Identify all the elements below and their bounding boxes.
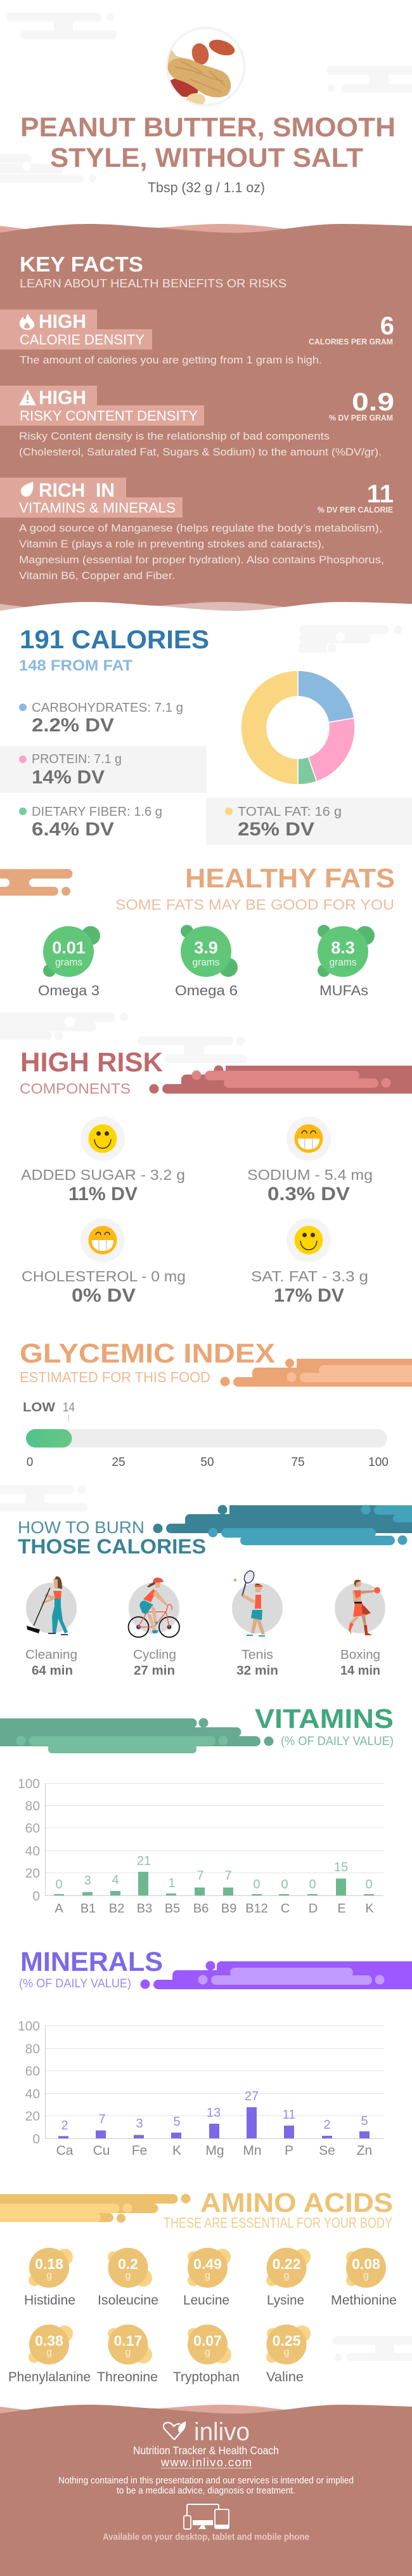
heading: amino acids: AMINO ACIDS: [200, 2188, 393, 2218]
donut chart: [241, 670, 355, 785]
bar chart: vitamins: 0: [32, 1889, 40, 1904]
badge: omega 6: Omega 6: [175, 983, 238, 998]
fact: risky content density: % DV PER GRAM: [329, 414, 393, 422]
subheading: (% OF DAILY VALUE): [281, 1734, 394, 1748]
bar chart: vitamins: 20: [25, 1866, 40, 1881]
item: added sugar: ADDED SUGAR - 3.2 g: [21, 1167, 185, 1183]
bar chart: vitamins: B9: [221, 1902, 236, 1916]
bar chart: vitamins: 60: [25, 1821, 40, 1836]
bar chart: vitamins: A: [55, 1902, 63, 1916]
bar chart: vitamins: B1: [80, 1902, 96, 1916]
bar chart: minerals: 5: [173, 2115, 181, 2129]
activity: tennis: [232, 1569, 283, 1678]
item: saturated fat: [251, 1218, 368, 1306]
bar chart: minerals: 80: [25, 2042, 40, 2056]
heading decoration: [150, 1066, 412, 1094]
heading decoration: [141, 1961, 412, 1989]
badge: mufas: [318, 925, 375, 998]
bar chart: minerals: 60: [25, 2064, 40, 2079]
amino: lysine: [266, 2248, 311, 2308]
amino: methionine: Methionine: [331, 2293, 397, 2308]
legend: protein: 14% DV: [32, 767, 105, 788]
bar chart: minerals: 27: [245, 2089, 259, 2103]
icon: person cycling: [128, 1578, 179, 1637]
logo: [164, 2418, 250, 2446]
amino: tryptophan: Tryptophan: [173, 2370, 240, 2384]
amino: threonine: Threonine: [97, 2370, 158, 2384]
legend: total fat: 25% DV: [238, 819, 314, 840]
bar chart: minerals: 40: [25, 2087, 40, 2102]
panel: footer: [0, 2405, 412, 2576]
heading decoration: [0, 869, 73, 896]
heading: calories: 191 CALORIES: [20, 625, 209, 654]
heading: those calories: THOSE CALORIES: [18, 1535, 206, 1558]
panel: amino acids: [0, 2188, 397, 2384]
heading: how to burn: HOW TO BURN: [18, 1518, 145, 1537]
fact: rich in vitamins and minerals: Vitamin B6, Copper and Fiber.: [19, 570, 175, 582]
gauge: 0: [27, 1456, 33, 1469]
fact: rich in vitamins and minerals: Vitamin E (plays a role in preventing strokes and cataracts),: [19, 538, 325, 550]
activity: tennis: 32 min: [236, 1664, 278, 1678]
panel: high risk: [20, 1047, 412, 1306]
bar chart: vitamins: [18, 1777, 383, 1916]
gauge: 75: [291, 1456, 305, 1469]
heading: healthy fats: HEALTHY FATS: [185, 863, 395, 894]
icon: grin face: [89, 1226, 117, 1255]
panel: key facts: [0, 224, 412, 618]
heading decoration: [153, 1505, 412, 1545]
item: sodium: SODIUM - 5.4 mg: [247, 1167, 373, 1183]
amino: leucine: Leucine: [183, 2293, 229, 2308]
legend: protein: PROTEIN: 7.1 g: [32, 752, 122, 766]
panel: calories: [0, 625, 412, 845]
title: PEANUT BUTTER, SMOOTH: [20, 112, 396, 143]
amino: histidine: [24, 2248, 75, 2308]
item: added sugar: [21, 1116, 185, 1205]
amino: valine: [266, 2324, 311, 2384]
subheading: LEARN ABOUT HEALTH BENEFITS OR RISKS: [20, 277, 286, 290]
badge: mufas: 8.3: [331, 938, 355, 957]
fact: risky content density: (Cholesterol, Saturated Fat, Sugars & Sodium) to the amount (%DV/gr).: [19, 446, 382, 458]
fact: calorie density: 6: [380, 312, 394, 340]
item: added sugar: 11% DV: [68, 1184, 138, 1205]
peanut photo: [166, 28, 245, 106]
legend: carbohydrates: [19, 701, 183, 736]
icon: smile face: [89, 1124, 117, 1153]
amino: threonine: [97, 2324, 158, 2384]
bar chart: minerals: P: [285, 2143, 293, 2158]
gauge: 14: [63, 1401, 75, 1415]
activity: tennis: Tenis: [241, 1648, 273, 1662]
icon: flame: [20, 313, 34, 330]
heading: minerals: MINERALS: [20, 1947, 163, 1977]
bar chart: minerals: Zn: [357, 2143, 372, 2158]
fact: risky content density: Risky Content density is the relationship of bad components: [19, 430, 330, 442]
bar chart: vitamins: B3: [137, 1902, 152, 1916]
amino: isoleucine: [98, 2248, 158, 2308]
subheading: from fat: 148 FROM FAT: [19, 657, 132, 674]
subheading: (% OF DAILY VALUE): [19, 1977, 131, 1991]
fact: calorie density: The amount of calories you are getting from 1 gram is high.: [20, 354, 322, 366]
bar chart: minerals: Cu: [93, 2143, 110, 2158]
icon: person playing tennis: [233, 1569, 265, 1637]
amino: leucine: g: [205, 2270, 210, 2281]
icon: leaf: [21, 481, 34, 497]
heading decoration: [0, 2194, 190, 2223]
bar chart: minerals: Mg: [205, 2143, 224, 2158]
amino: tryptophan: [173, 2324, 240, 2384]
fact: risky content density: RISKY CONTENT DENSITY: [20, 408, 198, 424]
amino: lysine: 0.22: [273, 2256, 300, 2272]
bar chart: minerals: 2: [323, 2118, 331, 2132]
gauge: 25: [112, 1456, 126, 1469]
amino: isoleucine: Isoleucine: [98, 2293, 158, 2308]
amino: lysine: Lysine: [267, 2293, 304, 2308]
website link: www.inlivo.com: [160, 2456, 252, 2469]
legend: protein: [19, 752, 122, 788]
fact: calorie density: [0, 310, 394, 366]
bar chart: minerals: 0: [32, 2132, 40, 2147]
bar chart: minerals: [18, 2019, 383, 2158]
amino: histidine: 0.18: [35, 2256, 63, 2272]
bar chart: vitamins: 0: [309, 1878, 316, 1892]
activity: boxing: [335, 1579, 385, 1678]
activity: cycling: [128, 1578, 179, 1678]
icon: person boxing: [349, 1579, 380, 1635]
item: sodium: 0.3% DV: [267, 1184, 350, 1205]
badge: omega 6: 3.9: [194, 938, 218, 957]
panel: healthy fats: [0, 863, 395, 998]
fact: rich in vitamins and minerals: A good source of Manganese (helps regulate the body’s metabolism),: [19, 522, 382, 534]
bar chart: minerals: Fe: [132, 2143, 147, 2158]
gauge: [23, 1401, 389, 1469]
legend: dietary fiber: 6.4% DV: [32, 819, 114, 840]
title: STYLE, WITHOUT SALT: [50, 143, 363, 173]
amino: threonine: 0.17: [114, 2332, 142, 2349]
badge: omega 6: [175, 925, 238, 998]
item: cholesterol: 0% DV: [72, 1285, 136, 1306]
heading: key facts: KEY FACTS: [20, 252, 143, 276]
item: cholesterol: [22, 1218, 186, 1306]
bar chart: minerals: K: [172, 2143, 181, 2158]
icon: grin face: [294, 1124, 323, 1153]
bar chart: minerals: 7: [98, 2112, 106, 2126]
badge: mufas: MUFAs: [319, 983, 368, 998]
disclaimer: Nothing contained in this presentation and our services is intended or implied: [58, 2475, 354, 2486]
bar chart: vitamins: C: [281, 1902, 290, 1916]
bar chart: minerals: 13: [207, 2106, 221, 2120]
amino: phenylalanine: [8, 2324, 91, 2384]
bar chart: vitamins: 40: [25, 1844, 40, 1859]
fact: rich in vitamins and minerals: Magnesium (essential for proper hydration). Also contains Phosphorus,: [19, 554, 384, 566]
amino: methionine: g: [363, 2270, 369, 2281]
logo: inlivo: [194, 2418, 250, 2446]
fact: rich in vitamins and minerals: % DV PER CALORIE: [318, 506, 393, 514]
activity: boxing: 14 min: [340, 1664, 380, 1678]
item: saturated fat: 17% DV: [274, 1285, 344, 1306]
item: sodium: [247, 1116, 373, 1205]
amino: histidine: g: [46, 2270, 52, 2281]
amino: lysine: g: [284, 2270, 289, 2281]
panel: glycemic index: [20, 1338, 412, 1469]
subheading: SOME FATS MAY BE GOOD FOR YOU: [115, 896, 394, 913]
bar chart: vitamins: 0: [281, 1878, 288, 1892]
bar chart: vitamins: D: [309, 1902, 318, 1916]
heading: glycemic index: GLYCEMIC INDEX: [20, 1338, 275, 1369]
bar chart: minerals: 20: [25, 2109, 40, 2124]
disclaimer: to be a medical advice, diagnosis or treatment.: [117, 2485, 295, 2496]
fact: calorie density: CALORIES PER GRAM: [309, 337, 393, 346]
amino: phenylalanine: g: [46, 2347, 52, 2358]
legend: dietary fiber: [19, 805, 162, 840]
item: saturated fat: SAT. FAT - 3.3 g: [251, 1268, 368, 1285]
panel: how to burn those calories: [18, 1505, 412, 1678]
bar chart: minerals: 5: [361, 2114, 368, 2128]
heading decoration: [221, 1359, 412, 1387]
activity: cleaning: 64 min: [32, 1664, 73, 1678]
bar chart: vitamins: 7: [196, 1869, 204, 1883]
panel: vitamins: [0, 1704, 394, 1916]
activity: boxing: Boxing: [340, 1648, 380, 1662]
bar chart: vitamins: 7: [224, 1869, 232, 1883]
bar chart: vitamins: 1: [168, 1876, 176, 1890]
amino: phenylalanine: Phenylalanine: [8, 2370, 91, 2384]
gauge: LOW: [23, 1401, 55, 1415]
amino: leucine: [183, 2248, 231, 2308]
bar chart: minerals: Se: [319, 2143, 335, 2158]
amino: histidine: Histidine: [24, 2293, 75, 2308]
amino: phenylalanine: 0.38: [35, 2332, 63, 2349]
amino: isoleucine: 0.2: [118, 2256, 138, 2272]
badge: omega 6: grams: [192, 957, 220, 968]
bar chart: minerals: 3: [136, 2117, 143, 2131]
heading: high risk: HIGH RISK: [20, 1047, 163, 1078]
badge: omega 3: Omega 3: [38, 983, 100, 998]
bar chart: vitamins: B12: [245, 1902, 268, 1916]
badge: omega 3: 0.01: [52, 938, 86, 957]
icon: person sweeping: [27, 1576, 68, 1635]
bar chart: minerals: Ca: [56, 2143, 74, 2158]
amino: tryptophan: 0.07: [193, 2332, 222, 2349]
bar chart: vitamins: B6: [193, 1902, 209, 1916]
amino: valine: Valine: [266, 2370, 304, 2384]
amino: valine: g: [284, 2347, 289, 2358]
fact: risky content density: [0, 386, 394, 458]
bar chart: minerals: Mn: [243, 2143, 262, 2158]
panel: minerals: [18, 1947, 412, 2158]
availability note: Available on your desktop, tablet and mobile phone: [103, 2532, 309, 2542]
fact: calorie density: CALORIE DENSITY: [20, 332, 145, 348]
bar chart: minerals: 100: [18, 2019, 40, 2034]
amino: methionine: 0.08: [352, 2256, 380, 2272]
legend: carbohydrates: CARBOHYDRATES: 7.1 g: [32, 701, 183, 715]
icon: devices: [184, 2504, 229, 2529]
fact: risky content density: 0.9: [352, 388, 394, 416]
bar chart: vitamins: 15: [334, 1860, 348, 1874]
legend: total fat: [225, 805, 342, 840]
activity: cleaning: Cleaning: [25, 1648, 77, 1662]
subheading: ESTIMATED FOR THIS FOOD: [20, 1369, 210, 1385]
bar chart: vitamins: 0: [55, 1878, 63, 1892]
badge: mufas: grams: [329, 957, 357, 968]
serving size: Tbsp (32 g / 1.1 oz): [148, 180, 265, 195]
gauge: 100: [368, 1456, 389, 1469]
bar chart: vitamins: B2: [109, 1902, 124, 1916]
disclaimer: [58, 2475, 354, 2496]
fact: rich in vitamins and minerals: RICH IN: [39, 479, 115, 501]
heading: vitamins: VITAMINS: [255, 1704, 394, 1734]
bar chart: minerals: 11: [283, 2108, 295, 2122]
amino: threonine: g: [126, 2347, 131, 2358]
bar chart: vitamins: 4: [112, 1873, 119, 1887]
fact: rich in vitamins and minerals: VITAMINS & MINERALS: [19, 500, 176, 516]
icon: smile face: [294, 1226, 323, 1255]
fact: rich in vitamins and minerals: 11: [367, 480, 394, 508]
legend: total fat: TOTAL FAT: 16 g: [238, 805, 342, 819]
item: cholesterol: CHOLESTEROL - 0 mg: [22, 1268, 186, 1285]
activity: cleaning: [25, 1576, 77, 1678]
bar chart: vitamins: 21: [137, 1854, 151, 1868]
amino: valine: 0.25: [273, 2332, 301, 2349]
bar chart: vitamins: E: [337, 1902, 346, 1916]
amino: tryptophan: g: [205, 2347, 210, 2358]
bar chart: vitamins: K: [365, 1902, 374, 1916]
activity: cycling: Cycling: [133, 1648, 176, 1662]
tagline: Nutrition Tracker & Health Coach: [133, 2444, 279, 2457]
bar chart: vitamins: 3: [84, 1874, 91, 1888]
fact: calorie density: HIGH: [39, 310, 86, 332]
icon: warning triangle: [19, 389, 36, 405]
heading decoration: [0, 1718, 274, 1753]
title: [20, 112, 396, 173]
amino: methionine: [331, 2248, 397, 2308]
bar chart: vitamins: 80: [25, 1799, 40, 1814]
bar chart: vitamins: 0: [365, 1878, 373, 1892]
activity: cycling: 27 min: [134, 1664, 175, 1678]
bar chart: vitamins: 100: [18, 1777, 40, 1791]
gauge: 50: [200, 1456, 214, 1469]
subheading: COMPONENTS: [20, 1080, 131, 1097]
amino: isoleucine: g: [126, 2270, 131, 2281]
fact: rich in vitamins and minerals: [0, 478, 394, 582]
legend: carbohydrates: 2.2% DV: [32, 715, 114, 736]
badge: omega 3: grams: [55, 957, 82, 968]
bar chart: vitamins: B5: [165, 1902, 180, 1916]
fact: risky content density: HIGH: [39, 386, 86, 409]
bar chart: vitamins: 0: [253, 1878, 261, 1892]
legend: dietary fiber: DIETARY FIBER: 1.6 g: [32, 805, 162, 819]
bar chart: minerals: 2: [61, 2119, 68, 2133]
badge: omega 3: [38, 926, 100, 998]
amino: leucine: 0.49: [193, 2256, 222, 2272]
